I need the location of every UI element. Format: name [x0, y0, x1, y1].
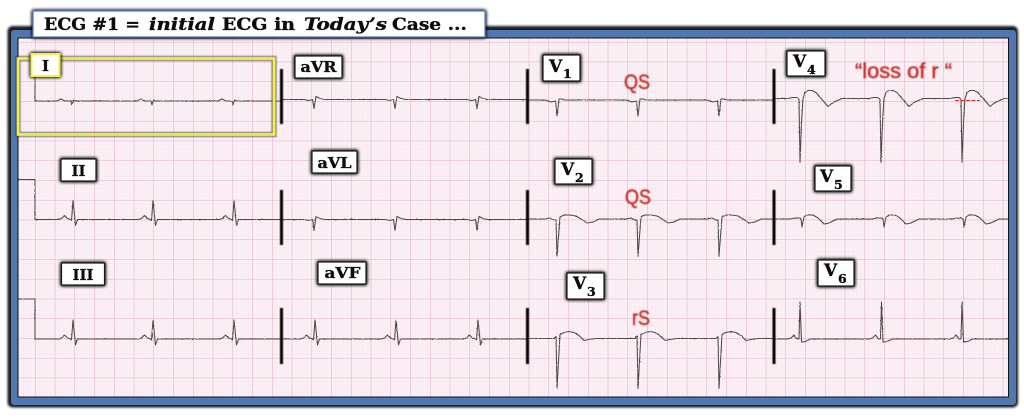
label: aVL	[312, 151, 357, 173]
label: V5: V	[819, 167, 834, 187]
title: initial	[149, 15, 216, 35]
lead V6 trace	[774, 302, 1008, 342]
title: Today’s	[304, 15, 387, 35]
label: V4: V	[792, 52, 807, 72]
label: II	[61, 159, 96, 181]
annotation: red dashed reference line	[955, 100, 980, 102]
label: V3: 3	[587, 284, 596, 299]
lead V4 trace	[774, 90, 1008, 162]
label: II: II	[71, 162, 86, 180]
label: V6: 6	[838, 271, 847, 286]
label: V1: V	[548, 57, 563, 77]
annotation: QS V2: QS	[625, 186, 651, 209]
label: aVL: aVL	[318, 154, 352, 172]
lead V2 trace	[527, 215, 774, 256]
label: V2: 2	[575, 170, 584, 185]
label: III: III	[72, 266, 94, 284]
label: V6: V	[823, 261, 838, 281]
label: I	[32, 54, 60, 76]
title: ECG in	[222, 15, 295, 35]
label: V6	[818, 260, 854, 286]
annotation: QS V1: QS	[624, 71, 650, 94]
label: V2: V	[560, 160, 575, 180]
label: V3	[567, 273, 604, 299]
title	[33, 11, 485, 37]
label: V4: 4	[807, 62, 816, 77]
label: aVF: aVF	[324, 264, 361, 282]
lead aVR trace	[281, 96, 527, 108]
lead I trace	[35, 77, 281, 105]
lead V3 trace	[527, 332, 774, 388]
lead V5 trace	[774, 215, 1008, 227]
label: aVR: aVR	[300, 58, 337, 76]
annotation: loss of r: “loss of r “	[855, 60, 952, 83]
label: V1: 1	[563, 66, 572, 81]
lead III trace	[18, 299, 281, 345]
annotation: rS V3: rS	[632, 307, 650, 330]
label: V1	[543, 55, 580, 81]
label: aVF	[318, 262, 366, 284]
label: aVR	[295, 56, 342, 78]
lead aVL trace	[281, 216, 527, 230]
title: ECG #1 =	[44, 15, 140, 35]
label: I: I	[42, 57, 49, 75]
lead V1 trace	[527, 99, 774, 116]
label: V3: V	[572, 274, 587, 294]
label: V5	[815, 166, 851, 192]
title: Case ...	[392, 15, 467, 35]
highlight box around lead I	[18, 58, 274, 134]
label: III	[62, 263, 104, 285]
lead II trace	[18, 180, 281, 226]
label: V2	[555, 159, 592, 185]
lead aVF trace	[281, 320, 527, 345]
label: V5: 5	[834, 177, 843, 192]
label: V4	[787, 51, 825, 77]
lead separators	[282, 69, 774, 364]
